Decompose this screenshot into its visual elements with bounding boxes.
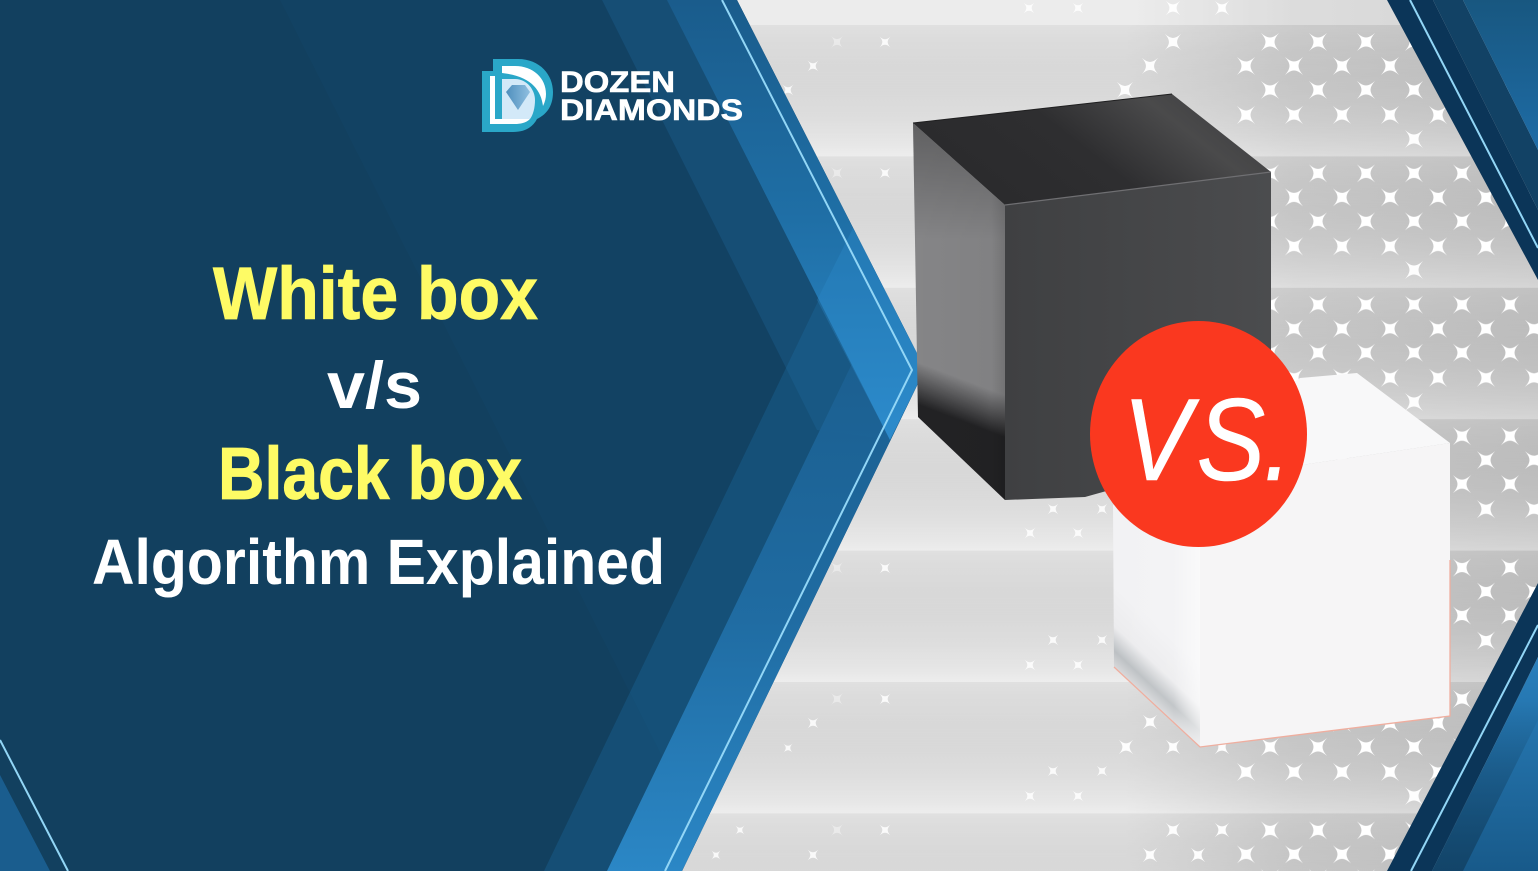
white cube [1113, 373, 1450, 747]
photo background: grey banded star pattern [600, 0, 1538, 871]
icon: diamond [506, 85, 530, 110]
chevron light outline [665, 0, 912, 871]
left navy chevron panel [0, 0, 940, 871]
VS badge [1090, 321, 1307, 547]
black cube [913, 94, 1271, 500]
logo: Dozen Diamonds [482, 59, 743, 132]
title line: Black box: Black box [218, 432, 522, 515]
title [92, 252, 665, 598]
icon: double D mark with diamond [482, 59, 553, 132]
bottom-right corner accent [1387, 583, 1538, 871]
wordmark: DIAMONDS [560, 94, 743, 127]
title line: White box: White box [213, 252, 538, 335]
wordmark: DOZEN [560, 66, 675, 99]
title line: Algorithm Explained: Algorithm Explained [92, 526, 665, 598]
bottom-left corner accent [0, 740, 68, 871]
title line: v/s: v/s [327, 348, 422, 422]
VS label: VS. [1123, 375, 1292, 505]
top-right corner accent [1387, 0, 1538, 280]
